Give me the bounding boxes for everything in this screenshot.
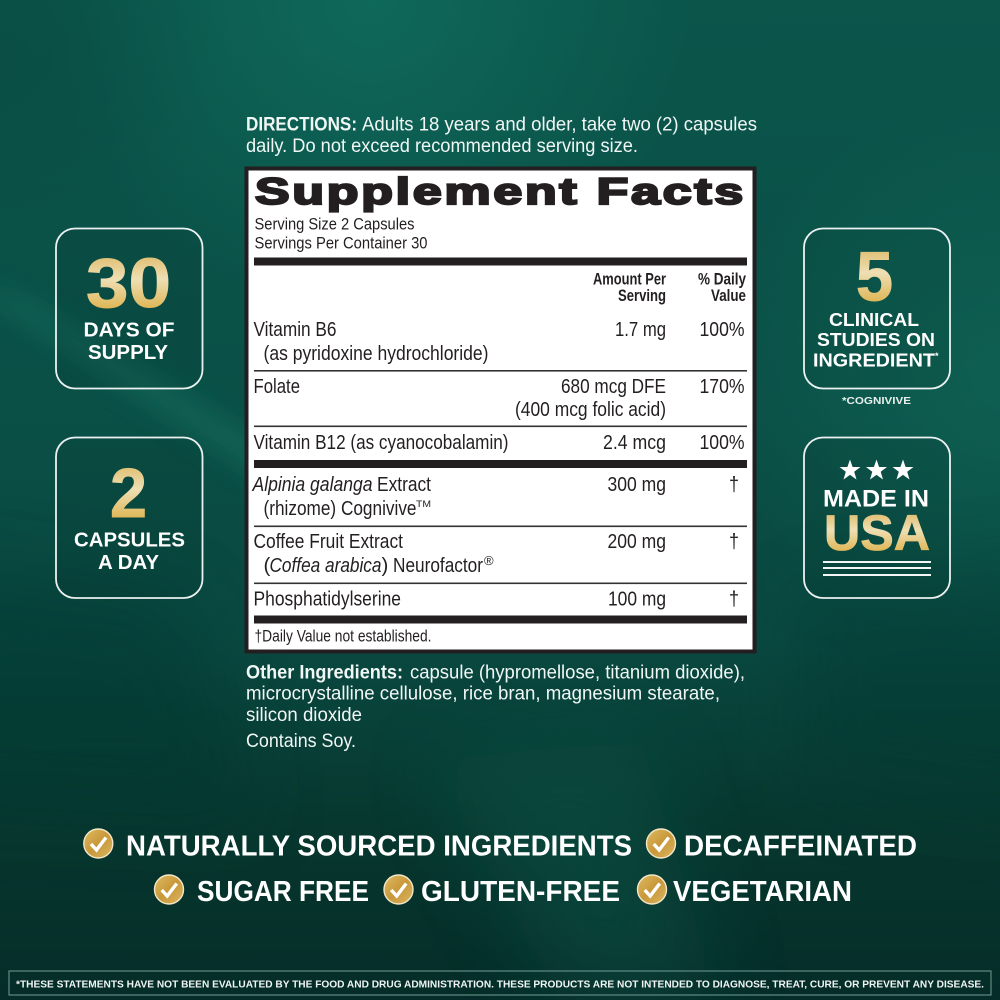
- row: phosphatidylserine: 100 mg: [608, 588, 666, 610]
- icon: three stars: [840, 460, 914, 480]
- heading: supplement facts: Supplement Facts: [255, 171, 746, 212]
- row: coffee fruit extract: †: [729, 530, 739, 553]
- decaffeinated: DECAFFEINATED: [684, 830, 917, 862]
- label: CAPSULES: [74, 530, 185, 552]
- row: vitamin b12: Vitamin B12 (as cyanocobalamin): [254, 431, 508, 454]
- icon: check: [646, 829, 676, 858]
- label: STUDIES ON: [817, 329, 935, 350]
- usa: USA: [824, 505, 930, 561]
- row: coffee fruit extract: ®: [484, 553, 494, 568]
- number 5: 5: [856, 238, 893, 316]
- row: alpinia galanga: (rhizome) Cognivive: [264, 497, 416, 520]
- row: coffee fruit extract: Neurofactor: [393, 554, 483, 577]
- other ingredients text: capsule (hypromellose, titanium dioxide),: [410, 662, 745, 684]
- label: SUPPLY: [88, 342, 169, 364]
- row: alpinia galanga: Alpinia galanga: [251, 473, 372, 496]
- row: vitamin b6: 100%: [700, 318, 744, 341]
- row: vitamin b12: 100%: [700, 431, 744, 454]
- row: coffee fruit extract: Coffee Fruit Extract: [254, 530, 403, 553]
- row: coffee fruit extract: ): [382, 554, 388, 577]
- row: vitamin b6: [254, 318, 744, 365]
- label: *: [935, 351, 939, 361]
- row: vitamin b6: Vitamin B6: [254, 318, 336, 341]
- column headers: [593, 270, 747, 305]
- other ingredients text: Contains Soy.: [246, 730, 356, 752]
- label: [74, 530, 185, 574]
- row: coffee fruit extract: [254, 530, 739, 577]
- row: coffee fruit extract: 200 mg: [608, 530, 666, 553]
- row: folate: 680 mcg DFE: [561, 375, 666, 398]
- other ingredients text: silicon dioxide: [246, 704, 362, 726]
- gluten-free: GLUTEN-FREE: [421, 876, 620, 908]
- number 30: 30: [86, 244, 171, 322]
- disclaimer text: *THESE STATEMENTS HAVE NOT BEEN EVALUATED BY THE FOOD AND DRUG ADMINISTRATION. THESE PRODUCTS ARE NOT INTENDED TO DIAGNOSE, TREAT, CURE, OR PREVENT ANY DISEASE.: [16, 980, 984, 990]
- directions text: Adults 18 years and older, take two (2) capsules: [362, 114, 757, 136]
- other ingredients text: microcrystalline cellulose, rice bran, magnesium stearate,: [246, 682, 720, 704]
- column headers: Serving: [618, 287, 666, 305]
- row: alpinia galanga: 300 mg: [608, 473, 666, 496]
- label: CLINICAL: [829, 309, 919, 330]
- directions text: DIRECTIONS:: [246, 114, 357, 136]
- row: folate: (400 mcg folic acid): [515, 398, 666, 421]
- directions text: [246, 114, 757, 157]
- row: vitamin b12: [254, 431, 744, 454]
- icon: check: [384, 875, 413, 904]
- naturally sourced ingredients: NATURALLY SOURCED INGREDIENTS: [126, 830, 632, 862]
- badge: 30 days of supply: [56, 228, 202, 388]
- row: alpinia galanga: [251, 473, 739, 520]
- claims: row one: [84, 829, 917, 862]
- row: alpinia galanga: †: [729, 473, 739, 496]
- sugar free: SUGAR FREE: [197, 876, 369, 908]
- row: alpinia galanga: Extract: [377, 473, 431, 496]
- label: DAYS OF: [84, 320, 174, 342]
- column headers: % Daily: [698, 270, 747, 288]
- icon: check: [638, 875, 666, 904]
- row: folate: 170%: [700, 375, 744, 398]
- row: phosphatidylserine: [254, 588, 739, 610]
- number 2: 2: [110, 454, 147, 532]
- footnote: †Daily Value not established.: [254, 628, 432, 646]
- made in: MADE IN: [823, 486, 929, 512]
- row: phosphatidylserine: Phosphatidylserine: [254, 588, 401, 610]
- badge: 2 capsules a day: [56, 438, 202, 598]
- row: vitamin b6: 1.7 mg: [615, 318, 666, 341]
- other ingredients text: [246, 662, 745, 752]
- row: coffee fruit extract: Coffea arabica: [270, 554, 382, 577]
- vegetarian: VEGETARIAN: [673, 876, 852, 908]
- row: vitamin b6: (as pyridoxine hydrochloride): [264, 342, 488, 365]
- badge: 5 clinical studies: [804, 228, 950, 388]
- column headers: Value: [711, 287, 746, 305]
- icon: check: [154, 875, 184, 904]
- icon: check: [84, 829, 113, 858]
- label: INGREDIENT: [813, 350, 936, 370]
- row: folate: [254, 375, 744, 421]
- row: vitamin b12: 2.4 mcg: [603, 431, 666, 454]
- label: [813, 309, 939, 370]
- serving information: Serving Size 2 Capsules: [254, 216, 414, 234]
- footnote: cognivive: *COGNIVIVE: [842, 395, 911, 407]
- column headers: Amount Per: [593, 270, 666, 288]
- row: phosphatidylserine: †: [729, 588, 739, 610]
- row: coffee fruit extract: (: [264, 554, 270, 577]
- claims: row two: [154, 875, 852, 908]
- panel: supplement facts: [246, 168, 754, 652]
- label: [84, 320, 174, 364]
- row: folate: Folate: [254, 375, 300, 398]
- disclaimer band: [9, 971, 991, 995]
- other ingredients text: Other Ingredients:: [246, 662, 403, 684]
- serving information: Servings Per Container 30: [254, 234, 428, 252]
- badge: made in usa: [804, 438, 950, 598]
- serving information: [254, 216, 428, 252]
- stripes: [823, 561, 931, 576]
- row: alpinia galanga: TM: [416, 499, 431, 510]
- directions text: daily. Do not exceed recommended serving size.: [246, 135, 638, 157]
- label: A DAY: [98, 552, 160, 574]
